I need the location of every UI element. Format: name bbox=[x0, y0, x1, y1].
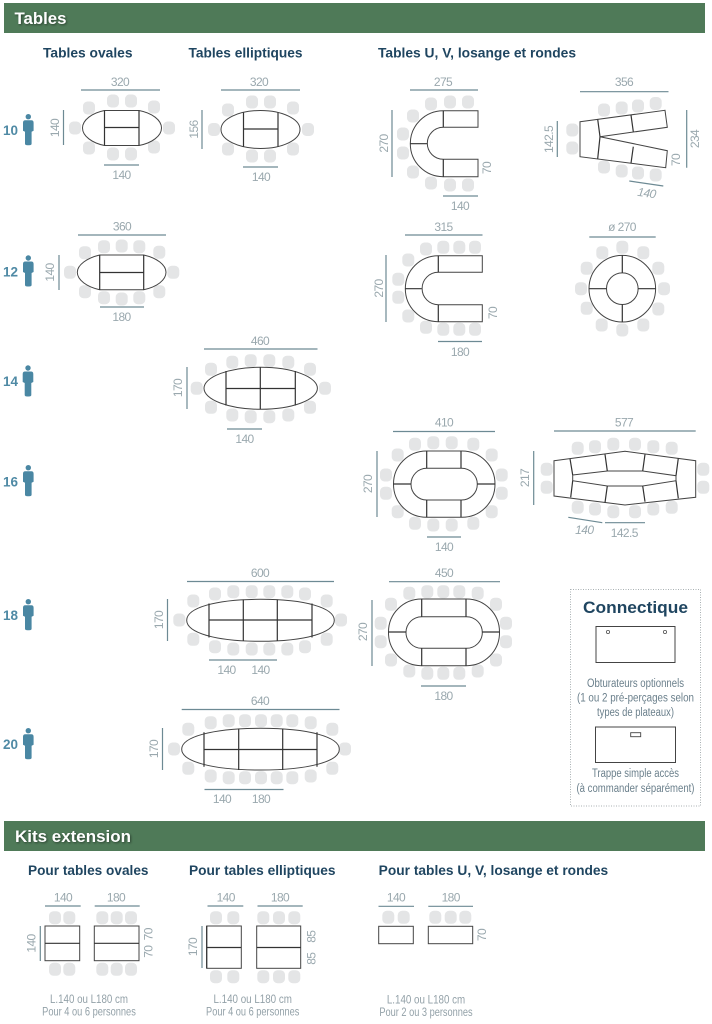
kit: tables elliptiques: 180 bbox=[271, 891, 290, 905]
table: oval 320: 140 bbox=[48, 118, 62, 137]
table: U 275: 70 bbox=[480, 161, 494, 174]
kit: tables elliptiques: Pour 4 ou 6 personnes bbox=[206, 1007, 300, 1019]
table: stadium 410: 410 bbox=[435, 416, 454, 430]
person count: 12: 12 bbox=[3, 264, 18, 280]
table: U 275: 140 bbox=[451, 199, 470, 213]
person count: 12 bbox=[3, 255, 34, 286]
table: stadium 450: 270 bbox=[356, 622, 370, 641]
heading: Tables ovales: Tables ovales bbox=[43, 46, 132, 60]
table: V 356: 140 bbox=[637, 185, 657, 201]
table: lozenge 577: 217 bbox=[518, 468, 532, 487]
table: U 315: 315 bbox=[434, 220, 454, 234]
table: lozenge 577: 142.5 bbox=[611, 526, 639, 540]
person count: 20: 20 bbox=[3, 736, 18, 752]
table: lozenge 577: 140 bbox=[575, 523, 594, 537]
kit: tables U, V, losange et rondes bbox=[378, 891, 489, 1019]
table: U 315: 180 bbox=[451, 345, 470, 359]
kit: tables ovales: Pour 4 ou 6 personnes bbox=[42, 1007, 136, 1019]
heading: Pour tables elliptiques: Pour tables elliptiques bbox=[189, 863, 336, 878]
table: elliptical 320: 320 bbox=[250, 75, 269, 89]
section header: Tables bbox=[4, 3, 705, 33]
person count: 10 bbox=[3, 114, 34, 145]
person count: 18 bbox=[3, 599, 34, 630]
table: elliptical 640: 640 bbox=[251, 694, 270, 708]
table: V 356: 142.5 bbox=[542, 125, 556, 153]
table: oval 320 bbox=[48, 75, 175, 182]
person count: 20 bbox=[3, 728, 34, 759]
table: U 275: 270 bbox=[377, 133, 391, 153]
kit: tables U, V, losange et rondes: Pour 2 ou 3 personnes bbox=[379, 1007, 473, 1019]
kit: tables ovales: 70 bbox=[142, 927, 156, 940]
caption: obturateurs bbox=[577, 678, 694, 719]
kit: tables elliptiques bbox=[186, 891, 318, 1019]
kit: tables ovales: 180 bbox=[107, 891, 126, 905]
kit: tables U, V, losange et rondes: 180 bbox=[442, 891, 461, 905]
table: elliptical 640 bbox=[147, 694, 351, 806]
table: stadium 410: 140 bbox=[435, 540, 454, 554]
table: stadium 450: 450 bbox=[435, 566, 454, 580]
kit: tables elliptiques: L.140 ou L180 cm bbox=[213, 994, 292, 1006]
section header: Kits extension bbox=[4, 821, 705, 851]
table: stadium 410 bbox=[361, 416, 508, 554]
table: elliptical 320: 156 bbox=[187, 119, 201, 139]
panel: Connectique bbox=[570, 590, 700, 806]
kit: tables ovales: 140 bbox=[24, 933, 38, 953]
kit: tables U, V, losange et rondes: L.140 ou L180 cm bbox=[387, 994, 465, 1006]
table: elliptical 600: 140 bbox=[251, 663, 271, 677]
table: V 356: 356 bbox=[615, 75, 634, 89]
table: stadium 410: 270 bbox=[361, 474, 375, 493]
table: U 315: 70 bbox=[486, 306, 500, 319]
table: U 315: 270 bbox=[372, 278, 386, 298]
table: oval 320: 140 bbox=[112, 168, 132, 182]
kit: tables elliptiques: 85 bbox=[304, 930, 318, 943]
caption: trappe: Trappe simple accès bbox=[592, 768, 679, 780]
diagram: table top with two holes bbox=[596, 626, 675, 662]
table: elliptical 640: 140 bbox=[213, 792, 232, 806]
section header: Tables: Tables bbox=[14, 9, 66, 28]
table: elliptical 460: 460 bbox=[251, 334, 270, 348]
table: U 275 bbox=[377, 75, 494, 213]
person count: 16 bbox=[3, 465, 34, 496]
heading: Pour tables ovales: Pour tables ovales bbox=[28, 863, 148, 878]
heading: Tables elliptiques: Tables elliptiques bbox=[188, 46, 302, 60]
table: V 356: 70 bbox=[669, 153, 683, 166]
table: oval 360: 180 bbox=[112, 310, 132, 324]
person count: 18: 18 bbox=[3, 607, 18, 623]
kit: tables elliptiques: 85 bbox=[304, 952, 318, 965]
heading: Connectique: Connectique bbox=[583, 598, 688, 617]
person count: 14 bbox=[3, 365, 33, 396]
diagram: table top with access hatch bbox=[596, 727, 676, 762]
table: elliptical 460 bbox=[171, 334, 331, 446]
table: stadium 450: 180 bbox=[434, 689, 454, 703]
table: oval 360: 140 bbox=[43, 262, 57, 282]
table: oval 360 bbox=[43, 220, 179, 324]
kit: tables ovales: 140 bbox=[54, 891, 73, 905]
table: U 315 bbox=[372, 220, 500, 359]
person count: 16: 16 bbox=[3, 474, 18, 490]
kit: tables elliptiques: 170 bbox=[186, 937, 200, 956]
table: elliptical 320 bbox=[187, 75, 314, 184]
caption: obturateurs: Obturateurs optionnels bbox=[587, 678, 684, 690]
table: lozenge 577 bbox=[518, 416, 709, 540]
heading: Pour tables U, V, losange et rondes: Pour tables U, V, losange et rondes bbox=[379, 863, 608, 878]
caption: trappe bbox=[576, 768, 695, 795]
table: stadium 450 bbox=[356, 566, 512, 703]
section header: Kits extension: Kits extension bbox=[15, 827, 131, 846]
caption: obturateurs: (1 ou 2 pré-perçages selon bbox=[577, 692, 694, 704]
kit: tables elliptiques: 140 bbox=[217, 891, 236, 905]
table: V 356 bbox=[542, 75, 702, 201]
table: round 270 bbox=[575, 220, 670, 336]
caption: obturateurs: types de plateaux) bbox=[597, 707, 674, 719]
kit: tables ovales: 70 bbox=[142, 945, 156, 958]
person count: 10: 10 bbox=[3, 122, 18, 138]
table: lozenge 577: 577 bbox=[615, 416, 634, 430]
kit: tables U, V, losange et rondes: 70 bbox=[475, 928, 489, 941]
table: elliptical 600: 600 bbox=[251, 566, 270, 580]
table: elliptical 460: 140 bbox=[235, 432, 255, 446]
table: elliptical 640: 170 bbox=[147, 739, 161, 758]
table: elliptical 460: 170 bbox=[171, 378, 185, 397]
table: elliptical 320: 140 bbox=[252, 170, 271, 184]
kit: tables ovales: L.140 ou L180 cm bbox=[50, 994, 128, 1006]
table: oval 320: 320 bbox=[111, 75, 130, 89]
kit: tables U, V, losange et rondes: 140 bbox=[387, 891, 406, 905]
table: oval 360: 360 bbox=[113, 220, 132, 234]
person count: 14: 14 bbox=[3, 373, 18, 389]
table: V 356: 234 bbox=[688, 129, 702, 148]
table: elliptical 600: 140 bbox=[217, 663, 237, 677]
table: elliptical 640: 180 bbox=[252, 792, 271, 806]
table: round 270: ø 270 bbox=[608, 220, 637, 234]
table: elliptical 600 bbox=[152, 566, 347, 677]
heading: Tables U, V, losange et rondes: Tables U, V, losange et rondes bbox=[378, 46, 576, 60]
table: U 275: 275 bbox=[434, 75, 453, 89]
table: elliptical 600: 170 bbox=[152, 610, 166, 629]
kit: tables ovales bbox=[24, 891, 156, 1019]
